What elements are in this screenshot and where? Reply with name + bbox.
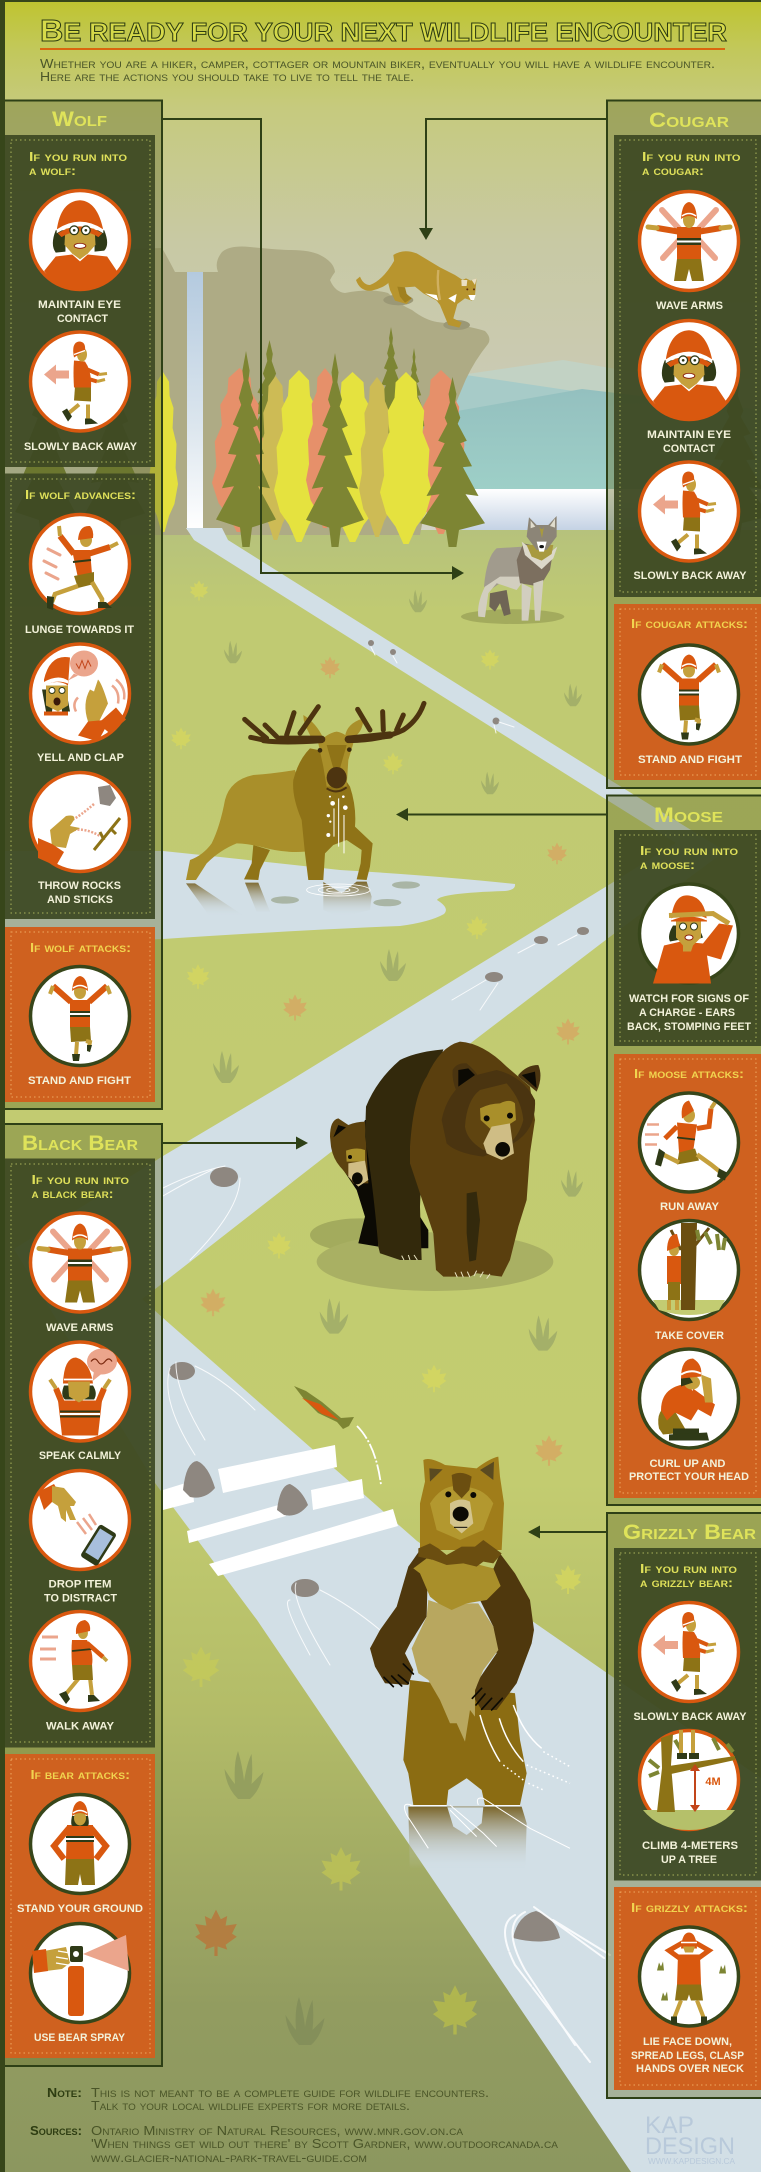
logo: kap design	[645, 2112, 736, 2166]
subheading: If wolf attacks:	[30, 940, 131, 955]
rapids	[163, 1445, 398, 1576]
label: SLOWLY BACK AWAY	[634, 570, 747, 582]
subheading: a grizzly bear:	[640, 1575, 733, 1590]
sources	[30, 2123, 558, 2165]
river rocks	[163, 640, 610, 2062]
label: CURL UP AND	[650, 1458, 726, 1470]
label: PROTECT YOUR HEAD	[629, 1471, 749, 1483]
cougar	[356, 251, 477, 330]
icon: slowly back away	[640, 462, 738, 561]
icon: maintain eye contact	[640, 320, 738, 420]
note: Talk to your local wildlife experts for more details.	[91, 2098, 410, 2113]
icon: lunge towards it	[30, 514, 130, 614]
arrow: cougar	[419, 119, 607, 240]
icon: wave arms	[640, 192, 738, 290]
icon: lie face down	[640, 1927, 738, 2026]
subheading: a moose:	[640, 857, 695, 872]
note: This is not meant to be a complete guide for wildlife encounters.	[91, 2085, 489, 2100]
background sky	[0, 0, 761, 540]
sources: Sources:	[30, 2123, 82, 2138]
subheading	[642, 149, 740, 178]
icon: speak calmly	[30, 1342, 130, 1441]
icon: maintain eye contact	[30, 190, 130, 290]
lake	[440, 489, 761, 533]
label: CLIMB 4-METERS	[642, 1840, 738, 1852]
heading: grizzly bear: Grizzly Bear	[623, 1521, 756, 1544]
icon: use bear spray	[30, 1924, 130, 2022]
logo: kap design: KAP	[645, 2112, 694, 2139]
label: WALK AWAY	[46, 1720, 115, 1732]
icon: run away	[640, 1093, 738, 1192]
label: CONTACT	[57, 313, 108, 325]
black bear and cub	[310, 1042, 553, 1291]
sources: 'When things get wild out there' by Scott Gardner, www.outdoorcanada.ca	[91, 2136, 558, 2151]
subheading: If you run into	[640, 1561, 737, 1576]
subheading	[640, 843, 738, 872]
panel: grizzly bear	[607, 1513, 761, 2098]
subheading: a black bear:	[32, 1186, 114, 1201]
label: CONTACT	[663, 443, 715, 455]
label: DROP ITEM	[48, 1578, 112, 1590]
intro text: Whether you are a hiker, camper, cottager or mountain biker, eventually you will have a wildlife encounter.	[40, 57, 715, 71]
forest	[15, 327, 761, 547]
arrow: grizzly	[528, 1526, 607, 1538]
icon: wave arms	[30, 1213, 130, 1312]
icon: throw rocks and sticks	[30, 772, 130, 872]
label: STAND AND FIGHT	[638, 754, 742, 766]
subheading: a cougar:	[642, 163, 704, 178]
label	[629, 1458, 749, 1483]
label: YELL AND CLAP	[37, 752, 124, 764]
label	[44, 1578, 117, 1604]
logo: kap design: DESIGN	[645, 2133, 735, 2160]
icon: slowly back away	[640, 1602, 738, 1702]
label: STAND AND FIGHT	[28, 1075, 131, 1087]
panel: cougar	[607, 100, 761, 788]
arrow: wolf	[162, 119, 464, 580]
heading: cougar: Cougar	[649, 109, 729, 132]
subheading: If bear attacks:	[30, 1767, 130, 1782]
note	[47, 2085, 489, 2113]
icon: climb up a tree	[640, 1730, 738, 1830]
label: SLOWLY BACK AWAY	[24, 441, 138, 453]
label: THROW ROCKS	[38, 880, 121, 892]
panel: moose	[607, 796, 761, 1505]
intro text	[40, 57, 715, 84]
panel: black bear	[5, 1124, 162, 2066]
river	[14, 528, 761, 2172]
logo: kap design: WWW.KAPDESIGN.CA	[648, 2157, 736, 2166]
wolf	[461, 516, 564, 624]
label	[627, 993, 751, 1033]
heading: moose: Moose	[654, 804, 723, 827]
ground	[0, 530, 761, 2172]
subheading: If you run into	[640, 843, 738, 858]
subheading	[640, 1561, 737, 1590]
subheading: If you run into	[29, 149, 127, 164]
ground details: fallen leaves	[171, 580, 581, 2035]
subheading	[29, 149, 127, 178]
label	[647, 429, 731, 455]
heading: wolf: Wolf	[52, 108, 107, 131]
subheading: a wolf:	[29, 163, 76, 178]
label: SPREAD LEGS, CLASP	[631, 2050, 744, 2062]
label	[642, 1840, 738, 1866]
label: MAINTAIN EYE	[38, 299, 121, 311]
heading: black bear: Black Bear	[22, 1132, 138, 1155]
label: UP A TREE	[661, 1854, 717, 1866]
label: WATCH FOR SIGNS OF	[629, 993, 749, 1005]
icon: watch for signs	[640, 884, 738, 984]
icon: stand your ground	[30, 1794, 130, 1894]
label: LIE FACE DOWN,	[643, 2036, 732, 2048]
moose	[186, 703, 424, 922]
sources: www.glacier-national-park-travel-guide.com	[91, 2150, 367, 2165]
label: TAKE COVER	[655, 1330, 724, 1342]
icon: stand and fight	[640, 645, 738, 744]
label: LUNGE TOWARDS IT	[25, 624, 134, 636]
label: STAND YOUR GROUND	[17, 1903, 143, 1915]
title underline	[40, 48, 725, 50]
subheading	[32, 1172, 129, 1201]
subheading: If wolf advances:	[25, 487, 136, 502]
label: MAINTAIN EYE	[647, 429, 731, 441]
sources: Ontario Ministry of Natural Resources, www.mnr.gov.on.ca	[91, 2123, 463, 2138]
icon: climb up a tree: 4M	[705, 1776, 721, 1788]
icon: drop item to distract	[30, 1470, 130, 1570]
label	[38, 880, 121, 906]
panel: wolf	[5, 100, 162, 1109]
label: TO DISTRACT	[44, 1592, 117, 1604]
label: WAVE ARMS	[656, 300, 723, 312]
subheading: If cougar attacks:	[631, 616, 748, 631]
label: WAVE ARMS	[46, 1322, 114, 1334]
label: SLOWLY BACK AWAY	[634, 1711, 747, 1723]
subheading: If grizzly attacks:	[631, 1900, 748, 1915]
label: AND STICKS	[47, 894, 113, 906]
arrow: black bear	[162, 1136, 308, 1150]
salmon	[294, 1386, 381, 1485]
label: BACK, STOMPING FEET	[627, 1021, 751, 1033]
grizzly bear standing	[370, 1457, 570, 1880]
label: A CHARGE - EARS	[639, 1007, 735, 1019]
label	[38, 299, 121, 325]
title: BE READY FOR YOUR NEXT WILDLIFE ENCOUNTER	[40, 13, 727, 48]
icon: curl up	[640, 1349, 738, 1448]
subheading: If moose attacks:	[634, 1066, 744, 1081]
cliff	[100, 247, 489, 535]
ground details: grass tufts	[213, 590, 583, 2045]
label: HANDS OVER NECK	[636, 2063, 744, 2075]
icon: walk away	[30, 1612, 130, 1710]
waterfall	[187, 272, 203, 530]
label: RUN AWAY	[660, 1201, 720, 1213]
icon: take cover	[640, 1220, 738, 1320]
subheading: If you run into	[642, 149, 740, 164]
label: USE BEAR SPRAY	[34, 2032, 126, 2044]
icon: stand and fight	[30, 966, 130, 1066]
label	[631, 2036, 744, 2075]
note: Note:	[47, 2085, 82, 2100]
pond	[5, 851, 515, 946]
icon: slowly back away	[30, 332, 130, 431]
icon: yell and clap	[30, 644, 130, 743]
intro text: Here are the actions you should take to live to tell the tale.	[40, 70, 414, 84]
label: SPEAK CALMLY	[39, 1450, 122, 1462]
arrow: moose	[396, 808, 607, 821]
mountains	[440, 360, 761, 495]
subheading: If you run into	[32, 1172, 129, 1187]
